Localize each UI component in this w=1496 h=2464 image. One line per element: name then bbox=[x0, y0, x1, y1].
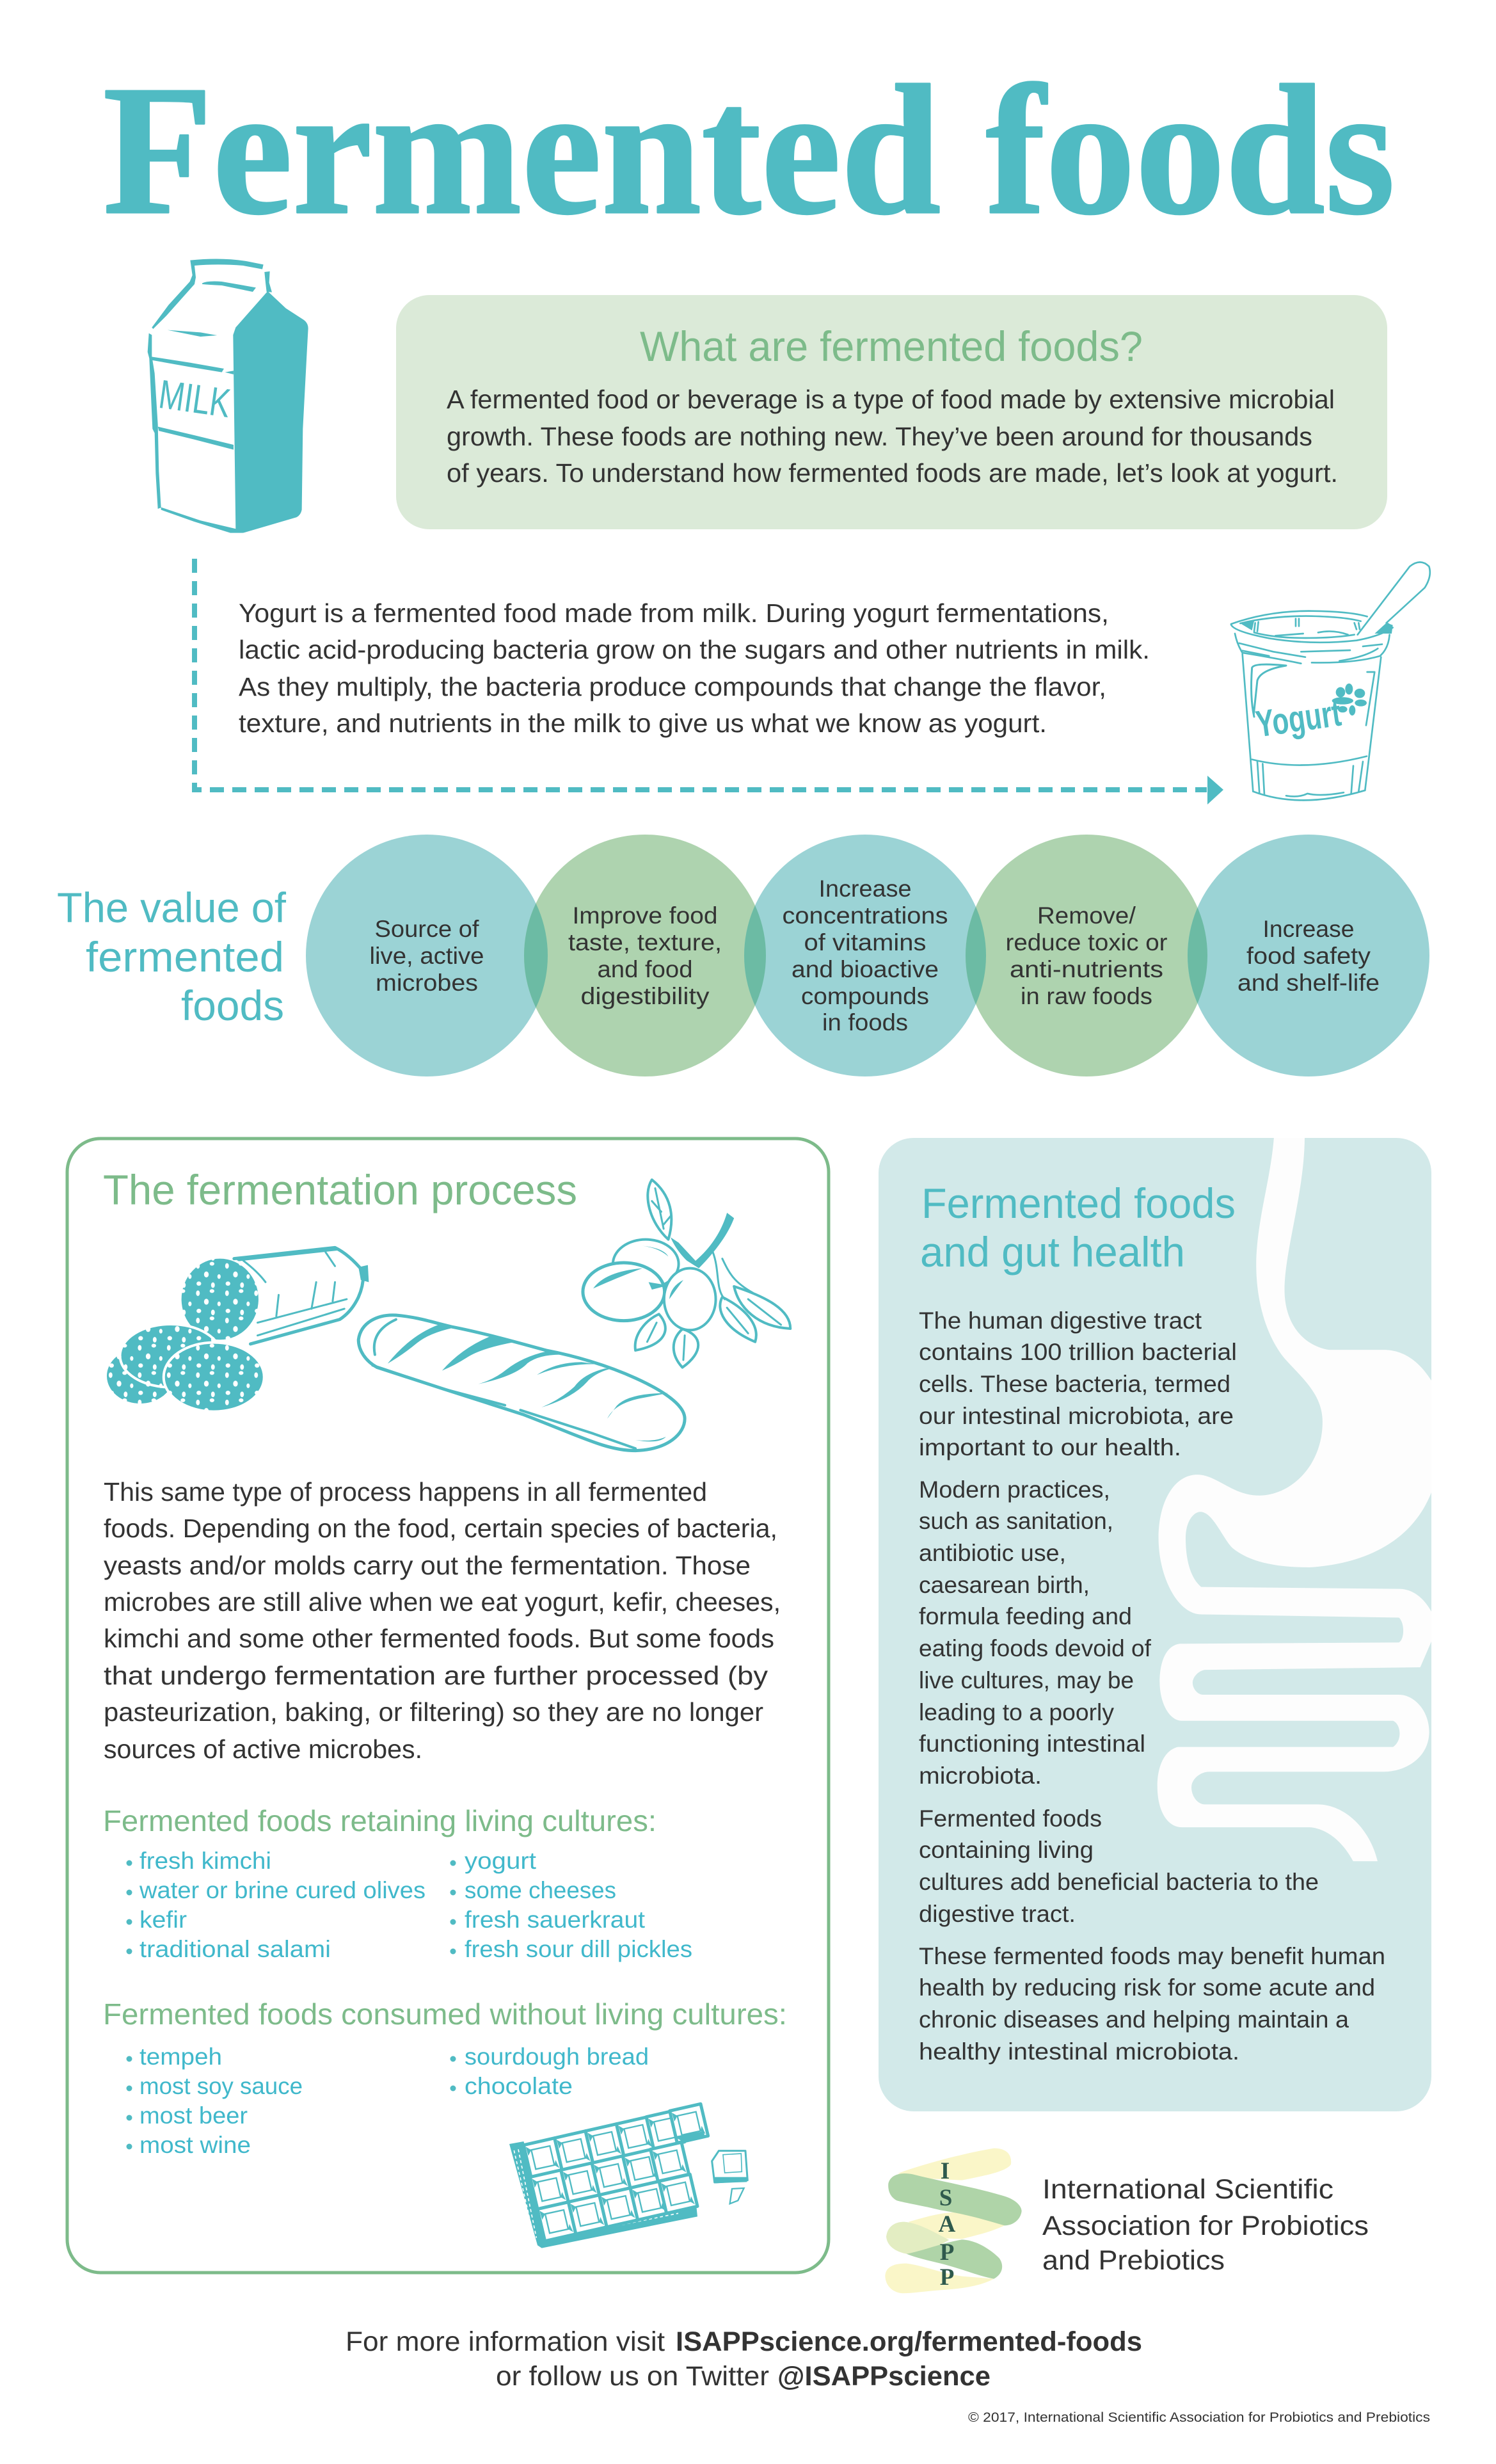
label: remove toxic: anti-nutrients bbox=[1010, 956, 1163, 982]
text: modern practices: live cultures, may be bbox=[919, 1667, 1134, 1693]
text: fermentation process description: This same type of process happens in all fermented bbox=[104, 1477, 707, 1507]
text: modern practices: leading to a poorly bbox=[919, 1699, 1114, 1725]
logo letters: S bbox=[939, 2185, 952, 2211]
text: yogurt explanation bbox=[239, 598, 1150, 738]
list: foods retaining living cultures: some cheeses bbox=[465, 1877, 616, 1903]
list: foods without living cultures: most wine bbox=[139, 2132, 251, 2158]
list: foods retaining living cultures: traditional salami bbox=[139, 1936, 331, 1962]
text: fermentation process description: that undergo fermentation are further processed (by bbox=[104, 1661, 768, 1690]
text: modern practices: caesarean birth, bbox=[919, 1572, 1090, 1598]
list: foods without living cultures: sourdough bread bbox=[465, 2044, 649, 2070]
logo mark bbox=[885, 2148, 1022, 2293]
heading: the value of fermented foods: foods bbox=[181, 982, 284, 1029]
list: foods without living cultures: tempeh bbox=[139, 2044, 222, 2070]
heading: fermented foods and gut health: and gut health bbox=[920, 1228, 1185, 1276]
label: source of live active microbes: live, active bbox=[370, 943, 484, 969]
icon: yogurt cup bbox=[1231, 562, 1430, 800]
text: yogurt explanation: texture, and nutrients in the milk to give us what we know as yogurt. bbox=[239, 708, 1047, 738]
circle: source of live active microbes bbox=[306, 835, 548, 1076]
icon: yogurt cup: Yogurt bbox=[1253, 692, 1344, 746]
text: fermentation process description: foods. Depending on the food, certain species of bacteria, bbox=[104, 1514, 777, 1543]
list: foods retaining living cultures bbox=[127, 1848, 692, 1962]
list: foods without living cultures: most soy sauce bbox=[139, 2073, 303, 2099]
text: modern practices bbox=[919, 1476, 1152, 1789]
label: increase vitamins: and bioactive bbox=[792, 956, 939, 982]
text: modern practices: such as sanitation, bbox=[919, 1508, 1113, 1534]
label: increase vitamins bbox=[782, 876, 948, 1036]
definition text: growth. These foods are nothing new. They’ve been around for thousands bbox=[447, 422, 1312, 451]
text: living cultures benefit: containing living bbox=[919, 1837, 1094, 1863]
logo: ISAPP bbox=[885, 2148, 1369, 2293]
footer: more information: or follow us on Twitter bbox=[496, 2361, 769, 2392]
heading: the value of fermented foods bbox=[57, 884, 287, 1029]
label: increase vitamins: concentrations bbox=[782, 902, 948, 929]
footer: more information: ISAPPscience.org/fermented-foods bbox=[676, 2326, 1142, 2357]
circle: improve taste bbox=[524, 835, 766, 1076]
heading: fermented foods and gut health bbox=[920, 1180, 1236, 1276]
label: remove toxic bbox=[1006, 902, 1167, 1009]
arrow: dashed path from milk to yogurt bbox=[195, 559, 1223, 804]
text: health benefits: chronic diseases and helping maintain a bbox=[919, 2006, 1349, 2033]
text: digestive tract bacteria: important to our health. bbox=[919, 1434, 1181, 1460]
label: remove toxic: reduce toxic or bbox=[1006, 929, 1167, 956]
panel: the fermentation process bbox=[67, 1139, 829, 2273]
list: foods retaining living cultures: fresh kimchi bbox=[139, 1848, 271, 1874]
icon: chocolate bar bbox=[509, 2104, 747, 2248]
label: remove toxic: in raw foods bbox=[1021, 983, 1152, 1009]
list: foods retaining living cultures: water or brine cured olives bbox=[139, 1877, 426, 1903]
panel: fermented foods and gut health bbox=[879, 1135, 1434, 2111]
subheading: foods retaining living cultures: Fermented foods retaining living cultures: bbox=[103, 1804, 656, 1837]
text: living cultures benefit bbox=[919, 1805, 1319, 1927]
label: increase vitamins: of vitamins bbox=[804, 929, 927, 956]
logo letters: A bbox=[939, 2211, 956, 2237]
label: remove toxic: Remove/ bbox=[1037, 902, 1136, 929]
list: foods without living cultures bbox=[127, 2044, 649, 2158]
label: improve taste bbox=[568, 902, 722, 1009]
text: digestive tract bacteria: cells. These bacteria, termed bbox=[919, 1371, 1230, 1397]
text: modern practices: antibiotic use, bbox=[919, 1540, 1066, 1566]
heading: the value of fermented foods: fermented bbox=[86, 933, 284, 980]
footer: more information: @ISAPPscience bbox=[777, 2361, 991, 2392]
illustration: digestive tract bbox=[1158, 1135, 1434, 1861]
text: digestive tract bacteria bbox=[919, 1308, 1237, 1460]
logo letters: I bbox=[941, 2158, 950, 2184]
title: Fermented foods bbox=[103, 47, 1395, 253]
text: modern practices: microbiota. bbox=[919, 1763, 1042, 1789]
text: fermentation process description bbox=[104, 1477, 781, 1764]
heading: the value of fermented foods: The value of bbox=[57, 884, 287, 931]
list: foods without living cultures: chocolate bbox=[465, 2073, 573, 2099]
text: living cultures benefit: digestive tract. bbox=[919, 1901, 1076, 1927]
text: health benefits bbox=[919, 1943, 1385, 2065]
label: improve taste: Improve food bbox=[572, 902, 718, 929]
logo name: International Scientific bbox=[1042, 2174, 1333, 2205]
logo name: and Prebiotics bbox=[1042, 2245, 1225, 2276]
footer: more information: For more information visit bbox=[346, 2326, 665, 2357]
panel: what are fermented foods bbox=[396, 295, 1387, 529]
text: health benefits: healthy intestinal microbiota. bbox=[919, 2038, 1239, 2065]
icon: milk carton bbox=[148, 259, 308, 533]
definition text: A fermented food or beverage is a type of food made by extensive microbial bbox=[447, 385, 1335, 414]
list: foods without living cultures: most beer bbox=[139, 2102, 248, 2129]
label: source of live active microbes: microbes bbox=[376, 970, 478, 996]
text: fermentation process description: microbes are still alive when we eat yogurt, kefir, cheeses, bbox=[104, 1587, 781, 1617]
text: health benefits: These fermented foods may benefit human bbox=[919, 1943, 1385, 1969]
logo name bbox=[1042, 2174, 1369, 2276]
label: food safety: Increase bbox=[1263, 916, 1354, 942]
logo letters: P bbox=[940, 2264, 954, 2291]
icon: milk carton: MILK bbox=[156, 372, 233, 426]
icon: baguette bbox=[358, 1315, 685, 1451]
text: digestive tract bacteria: contains 100 trillion bacterial bbox=[919, 1339, 1237, 1365]
text: health benefits: health by reducing risk for some acute and bbox=[919, 1974, 1375, 2001]
list: foods retaining living cultures: fresh sour dill pickles bbox=[465, 1936, 692, 1962]
text: yogurt explanation: Yogurt is a fermented food made from milk. During yogurt fermentations, bbox=[239, 598, 1109, 628]
text: modern practices: formula feeding and bbox=[919, 1603, 1132, 1629]
logo letters bbox=[939, 2158, 956, 2291]
definition text: of years. To understand how fermented foods are made, let’s look at yogurt. bbox=[447, 458, 1338, 488]
footer: more information bbox=[346, 2326, 1142, 2392]
chart: five overlapping value circles bbox=[306, 835, 1429, 1076]
subheading: foods consumed without living cultures: Fermented foods consumed without living cultures: bbox=[103, 1997, 787, 2031]
list: foods retaining living cultures: fresh sauerkraut bbox=[465, 1907, 646, 1933]
text: digestive tract bacteria: our intestinal microbiota, are bbox=[919, 1403, 1234, 1429]
text: modern practices: Modern practices, bbox=[919, 1476, 1110, 1503]
text: digestive tract bacteria: The human digestive tract bbox=[919, 1308, 1202, 1334]
logo letters: P bbox=[940, 2239, 954, 2266]
label: food safety: and shelf-life bbox=[1237, 970, 1380, 996]
list: foods retaining living cultures: kefir bbox=[139, 1907, 187, 1933]
label: improve taste: digestibility bbox=[581, 983, 710, 1009]
text: fermentation process description: kimchi and some other fermented foods. But some foods bbox=[104, 1624, 774, 1653]
heading: what are fermented foods: What are fermented foods? bbox=[640, 323, 1143, 370]
text: fermentation process description: sources of active microbes. bbox=[104, 1734, 422, 1764]
circle: food safety bbox=[1188, 835, 1429, 1076]
text: yogurt explanation: As they multiply, the bacteria produce compounds that change the flavor, bbox=[239, 672, 1106, 701]
label: improve taste: and food bbox=[598, 956, 692, 982]
circle: remove toxic bbox=[966, 835, 1207, 1076]
list: foods retaining living cultures: yogurt bbox=[465, 1848, 537, 1874]
definition text bbox=[447, 385, 1338, 488]
label: food safety bbox=[1237, 916, 1380, 996]
label: increase vitamins: Increase bbox=[819, 876, 911, 902]
label: improve taste: taste, texture, bbox=[568, 929, 722, 956]
heading: the fermentation process: The fermentation process bbox=[103, 1166, 577, 1213]
label: food safety: food safety bbox=[1246, 943, 1371, 969]
label: source of live active microbes bbox=[370, 916, 484, 996]
text: yogurt explanation: lactic acid-producing bacteria grow on the sugars and other nutrients in milk. bbox=[239, 635, 1150, 664]
text: fermentation process description: yeasts and/or molds carry out the fermentation. Those bbox=[104, 1551, 751, 1580]
label: increase vitamins: in foods bbox=[822, 1009, 908, 1036]
text: modern practices: functioning intestinal bbox=[919, 1731, 1145, 1757]
icon: salami bbox=[106, 1247, 369, 1412]
circle: increase vitamins bbox=[744, 835, 986, 1076]
icon: olives bbox=[583, 1180, 790, 1368]
text: fermentation process description: pasteurization, baking, or filtering) so they are no longer bbox=[104, 1697, 763, 1727]
copyright: © 2017, International Scientific Association for Probiotics and Prebiotics bbox=[968, 2410, 1430, 2425]
label: source of live active microbes: Source of bbox=[375, 916, 479, 942]
label: increase vitamins: compounds bbox=[801, 983, 929, 1009]
text: living cultures benefit: Fermented foods bbox=[919, 1805, 1102, 1832]
heading: fermented foods and gut health: Fermented foods bbox=[921, 1180, 1236, 1227]
logo name: Association for Probiotics bbox=[1042, 2211, 1369, 2241]
text: living cultures benefit: cultures add beneficial bacteria to the bbox=[919, 1869, 1319, 1895]
text: modern practices: eating foods devoid of bbox=[919, 1635, 1152, 1661]
